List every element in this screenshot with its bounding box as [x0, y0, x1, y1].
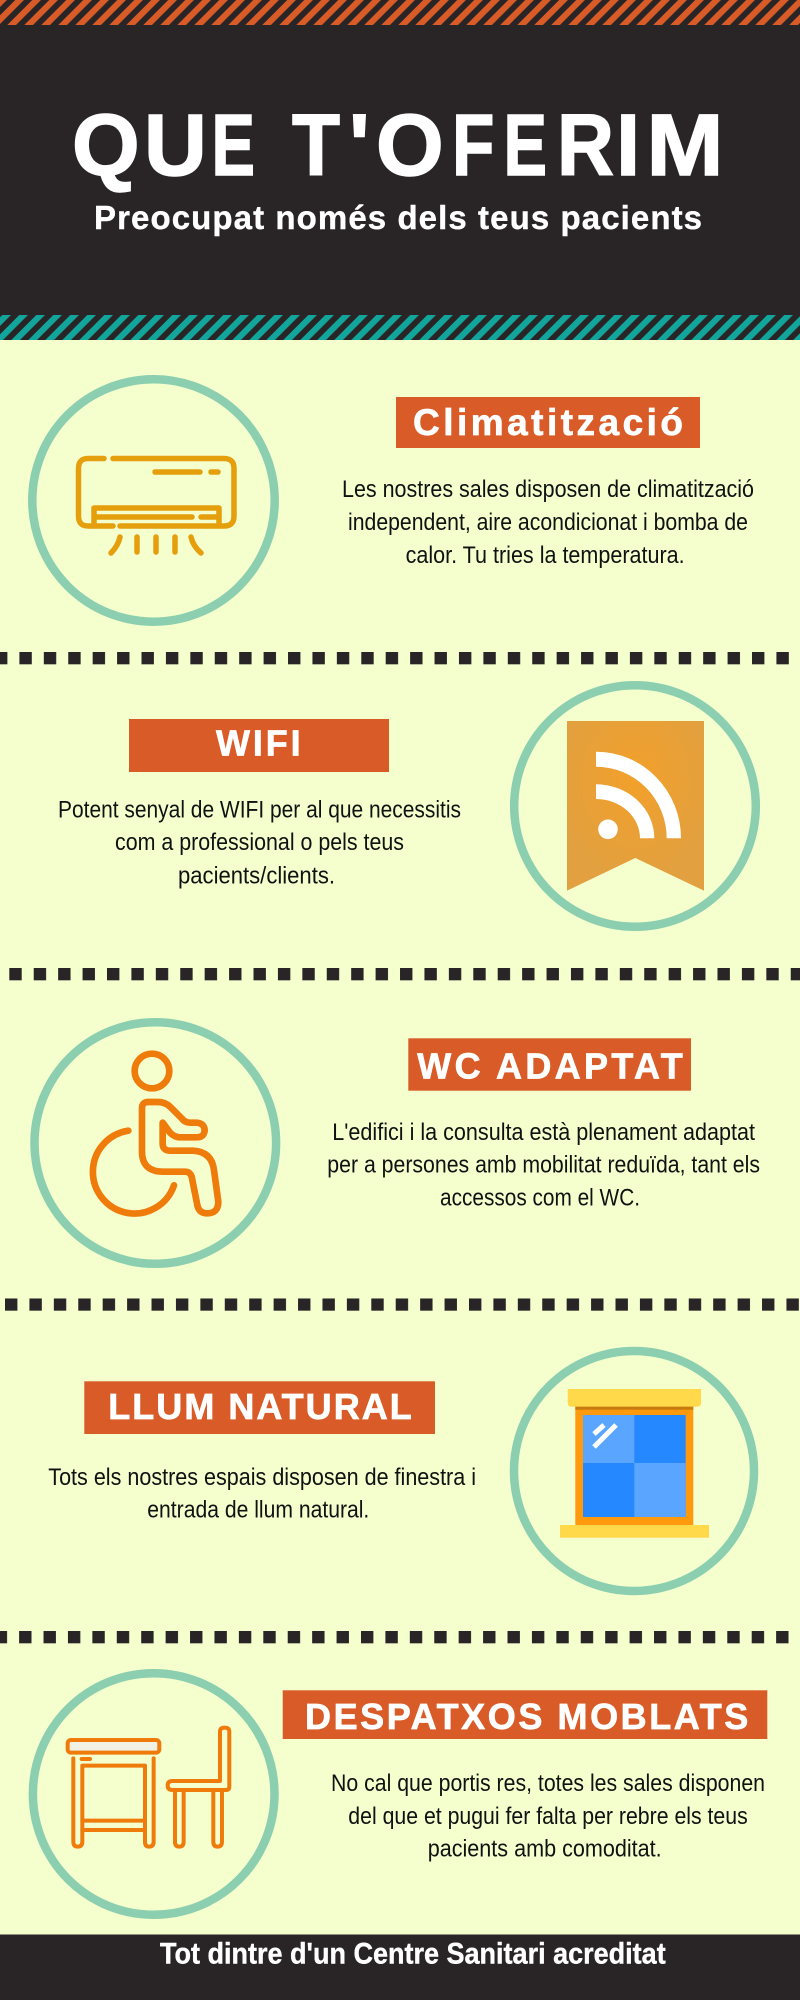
panel: wc adaptat [34, 1022, 760, 1264]
panel: llum natural [48, 1351, 754, 1591]
title: E [212, 97, 255, 194]
text: climatització description: calor. Tu tries la temperatura. [406, 542, 685, 569]
heading: WIFI: WIFI [216, 723, 301, 764]
heading: WC ADAPTAT: WC ADAPTAT [417, 1045, 683, 1086]
title: T [292, 97, 340, 194]
icon: air conditioner in circle [32, 379, 275, 622]
title: ' [349, 97, 370, 194]
text: despatxos description: del que et pugui fer falta per rebre els teus [348, 1803, 748, 1830]
footer bar [0, 1934, 800, 2000]
heading: DESPATXOS MOBLATS: DESPATXOS MOBLATS [305, 1696, 748, 1737]
text: llum description: Tots els nostres espais disposen de finestra i [48, 1464, 476, 1491]
text: llum description [48, 1464, 476, 1524]
title: U [144, 97, 207, 194]
title: F [452, 97, 494, 194]
text: despatxos description [331, 1770, 765, 1863]
panel: despatxos moblats [33, 1673, 767, 1915]
heading: WIFI [129, 719, 389, 772]
text: wifi description: com a professional o pels teus [115, 829, 404, 856]
text: climatització description [342, 476, 754, 569]
icon: wheelchair in circle [34, 1022, 276, 1264]
icon: wifi bookmark in circle [514, 685, 756, 927]
title: O [376, 97, 444, 194]
header banner [0, 0, 800, 340]
text: climatització description: independent, aire acondicionat i bomba de [348, 509, 748, 536]
heading: Climatització: Climatització [413, 402, 683, 443]
heading: LLUM NATURAL: LLUM NATURAL [108, 1386, 412, 1427]
title: I [616, 97, 640, 194]
icon: window in circle [514, 1351, 754, 1591]
title: E [504, 97, 547, 194]
icon: desk and chair in circle [33, 1673, 274, 1915]
text: climatització description: Les nostres sales disposen de climatització [342, 476, 754, 503]
subtitle: Preocupat només dels teus pacients [94, 199, 702, 236]
footer text: Tot dintre d'un Centre Sanitari acreditat [160, 1937, 666, 1970]
text: wifi description: Potent senyal de WIFI per al que necessitis [58, 797, 461, 824]
title: Q [72, 97, 140, 194]
title: M [646, 97, 724, 194]
text: llum description: entrada de llum natural. [147, 1497, 369, 1524]
heading: LLUM NATURAL [84, 1381, 435, 1434]
panel: climatització [32, 379, 754, 622]
text: wc description: accessos com el WC. [440, 1184, 640, 1211]
text: wifi description: pacients/clients. [178, 862, 335, 889]
title: R [557, 97, 614, 194]
text: despatxos description: pacients amb comoditat. [428, 1836, 662, 1863]
text: wc description: L'edifici i la consulta està plenament adaptat [332, 1119, 755, 1146]
text: wifi description [58, 797, 461, 889]
text: wc description [327, 1119, 760, 1211]
panel: wifi [58, 685, 756, 927]
